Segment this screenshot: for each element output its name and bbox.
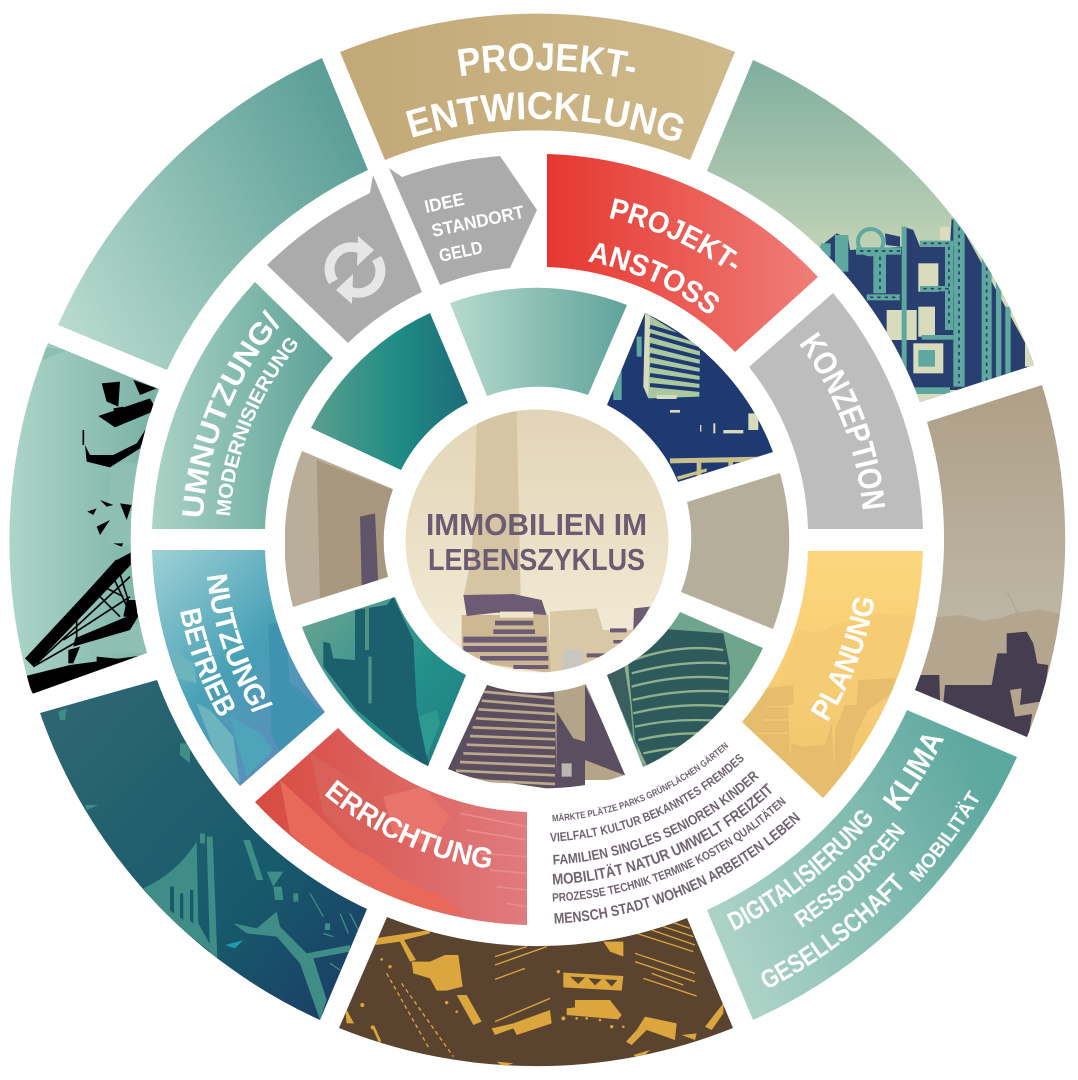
- center circle photo: [400, 405, 675, 680]
- outer segment: top-left teal panel: [58, 58, 368, 370]
- outer segment: future topics: MOBILITÄT: [908, 790, 979, 882]
- middle segment: Projektanstoss: [547, 154, 818, 352]
- outer segment: future topics: GESELLSCHAFT: [762, 872, 903, 988]
- keyword text block: [550, 742, 800, 924]
- middle segment: Projektanstoss: ANSTOSS: [588, 242, 719, 314]
- outer segment: future topics: DIGITALISIERUNG: [726, 810, 872, 930]
- inner segment: left taupe skyline: [285, 451, 393, 607]
- outer segment: future topics: [707, 710, 1017, 1020]
- outer segment: future topics: RESSOURCEN: [794, 822, 905, 928]
- center title: [426, 508, 647, 577]
- middle segment: Projektanstoss: PROJEKT-: [610, 198, 738, 269]
- outer segment: dark teal street photo: [40, 680, 367, 1020]
- outer segment: left crane photo: [9, 343, 159, 694]
- outer segment: Projektentwicklung: PROJEKT-: [458, 43, 636, 77]
- inner segment: green striped tower: [607, 612, 763, 767]
- outer segment: Projektentwicklung: [340, 14, 735, 160]
- middle segment: Konzeption: [749, 293, 923, 529]
- middle segment: Umnutzung / Modernisierung: MODERNISIERUNG: [216, 338, 298, 516]
- keyword text block: MÄRKTE PLÄTZE PARKS GRÜNFLÄCHEN GÄRTEN: [552, 742, 728, 822]
- inner segment: bottom striped tower: [448, 684, 625, 788]
- inner segment: top teal: [450, 288, 627, 396]
- middle segment: Nutzung / Betrieb: NUTZUNG/: [207, 574, 273, 712]
- center title: IMMOBILIEN IM: [426, 508, 647, 542]
- middle segment: Idee Standort Geld: [389, 156, 537, 285]
- middle segment: Errichtung: [255, 728, 527, 925]
- keyword text block: MOBILITÄT NATUR UMWELT FREIZEIT: [552, 782, 772, 885]
- middle segment: Umnutzung / Modernisierung: UMNUTZUNG/: [182, 309, 280, 516]
- middle segment: Konzeption: KONZEPTION: [800, 332, 886, 510]
- keyword text block: FAMILIEN SINGLES SENIOREN KINDER: [553, 771, 760, 865]
- middle segment: Planung: PLANUNG: [810, 597, 874, 722]
- outer segment: aerial view brown photo: [339, 917, 733, 1066]
- middle segment: Nutzung / Betrieb: BETRIEB: [180, 608, 234, 716]
- inner segment: navy skyscraper: [607, 313, 773, 482]
- middle segment: cycle with refresh icon: [267, 175, 422, 343]
- middle segment: Nutzung / Betrieb: [152, 550, 325, 786]
- middle segment: Errichtung: ERRICHTUNG: [324, 780, 492, 868]
- outer segment: Projektentwicklung: ENTWICKLUNG: [406, 92, 684, 141]
- icon: refresh arrows: [325, 236, 385, 304]
- keyword text block: VIELFALT KULTUR BEKANNTES FREMDES: [550, 754, 744, 842]
- outer segment: future topics: KLIMA: [882, 735, 944, 812]
- middle segment: Idee Standort Geld: STANDORT: [430, 202, 526, 241]
- outer segment: right skyline photo: [915, 385, 1066, 737]
- keyword text block: PROZESSE TECHNIK TERMINE KOSTEN QUALITÄTEN: [552, 796, 786, 902]
- middle segment: Idee Standort Geld: GELD: [437, 237, 484, 266]
- outer segment: top-right skyline photo: [707, 60, 1034, 402]
- inner segment: top-left teal: [311, 313, 468, 470]
- keyword text block: MENSCH STADT WOHNEN ARBEITEN LEBEN: [554, 812, 800, 924]
- inner segment: right taupe: [681, 473, 789, 629]
- center title: LEBENSZYKLUS: [428, 543, 645, 577]
- inner segment: dark teal skyline: [302, 597, 466, 766]
- middle segment: Idee Standort Geld: IDEE: [423, 189, 466, 217]
- middle segment: Umnutzung / Modernisierung: [152, 282, 333, 529]
- middle segment: Planung: [742, 551, 923, 798]
